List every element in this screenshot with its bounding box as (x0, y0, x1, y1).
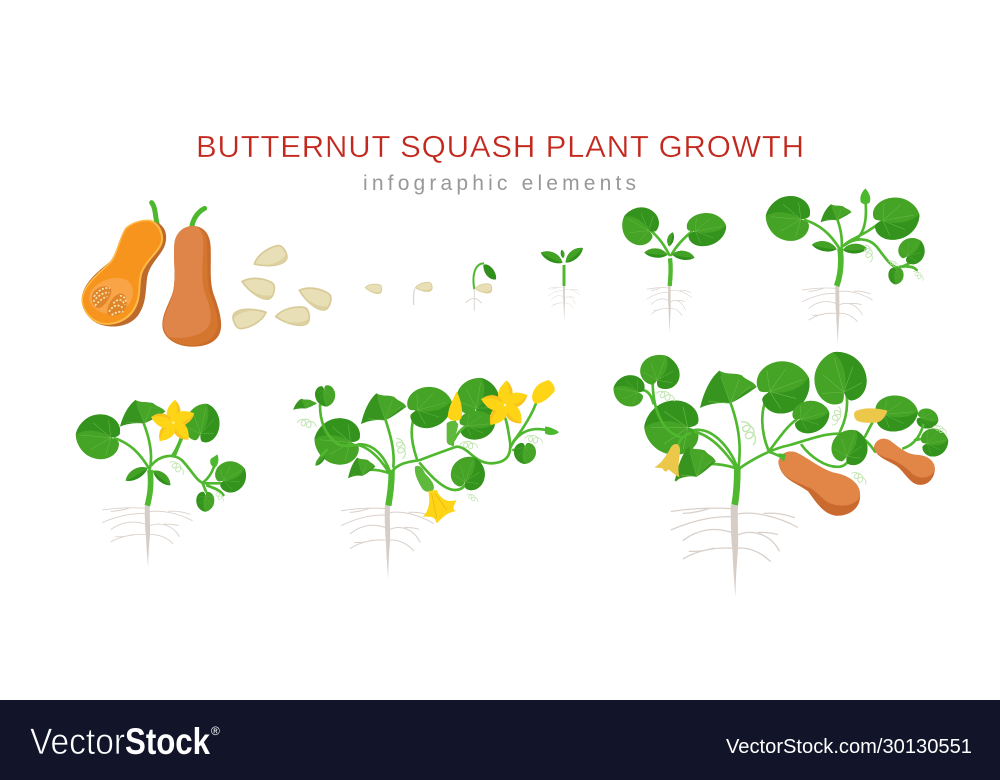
single seed (364, 283, 382, 294)
large butternut squash fruit (778, 451, 860, 516)
stage: flowering plant (293, 374, 559, 579)
sprout with closed cotyledon (466, 263, 496, 311)
back leaves (644, 400, 940, 455)
VectorStock logo: Vector (30, 721, 125, 762)
seeds group (231, 243, 334, 330)
title: BUTTERNUT SQUASH PLANT GROWTH (196, 129, 804, 164)
stage: young sprout (539, 244, 585, 322)
lower left plants (74, 374, 559, 579)
cut butternut squash half (82, 203, 166, 327)
roots (671, 505, 797, 597)
whole butternut squash (162, 208, 221, 347)
stage: seedling with two leaves (615, 200, 729, 334)
main stem (735, 468, 737, 505)
stage: first flower plant (74, 400, 252, 567)
yellow flower right (854, 408, 887, 423)
small butternut squash fruit (874, 439, 935, 485)
seedlings row (539, 188, 931, 344)
VectorStock logo: ® (211, 724, 220, 738)
subtitle: infographic elements (363, 172, 636, 195)
germinating seed (413, 282, 432, 305)
image id link: VectorStock.com/30130551 (726, 736, 972, 758)
vines (642, 383, 925, 480)
stage: fruiting plant (611, 346, 951, 597)
seed and early stages row (82, 203, 496, 347)
VectorStock logo (30, 721, 220, 762)
leaves (611, 346, 951, 481)
footer bar (0, 700, 1000, 780)
stage: plant with vine and bud (764, 188, 931, 344)
VectorStock logo: Stock (125, 721, 210, 762)
yellow bell flower left (654, 444, 680, 477)
tendrils (656, 391, 947, 484)
